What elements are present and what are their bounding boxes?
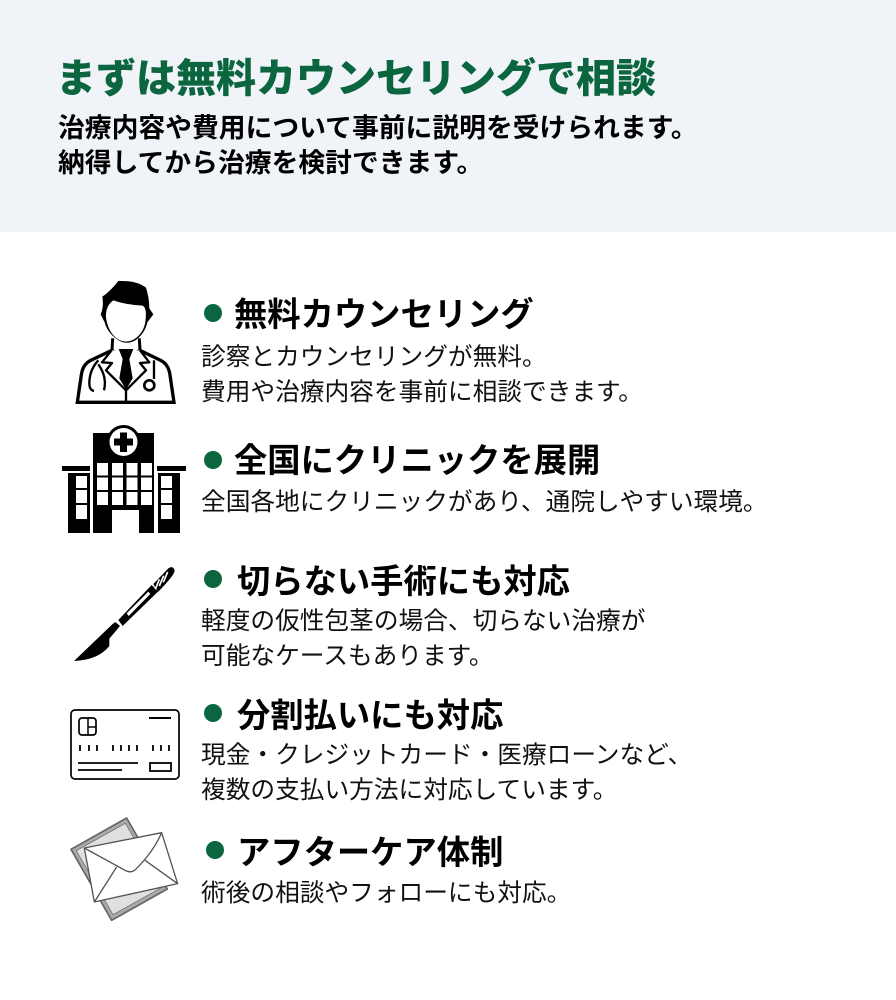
- heading: 分割払いにも対応: [237, 698, 503, 735]
- bullet: [206, 841, 224, 859]
- description: 複数の支払い方法に対応しています。: [201, 777, 617, 804]
- description: 軽度の仮性包茎の場合、切らない治療が: [201, 608, 645, 635]
- header description: [58, 113, 698, 178]
- bullet: [204, 304, 222, 322]
- title: まずは無料カウンセリングで相談: [56, 57, 656, 101]
- bullet: [204, 704, 222, 722]
- description: 診察とカウンセリングが無料。: [201, 344, 547, 371]
- header panel: [0, 0, 896, 232]
- description: [201, 742, 692, 804]
- bullet: [204, 570, 222, 588]
- header description: 納得してから治療を検討できます。: [58, 148, 483, 178]
- heading: 全国にクリニックを展開: [234, 443, 600, 480]
- description: 可能なケースもあります。: [201, 643, 494, 670]
- description: 現金・クレジットカード・医療ローンなど、: [201, 742, 692, 769]
- description: 術後の相談やフォローにも対応。: [201, 880, 571, 907]
- description: [201, 344, 643, 406]
- item: nationwide clinics: [201, 443, 768, 516]
- description: 全国各地にクリニックがあり、通院しやすい環境。: [201, 489, 768, 516]
- description: [201, 608, 645, 670]
- description: 費用や治療内容を事前に相談できます。: [201, 379, 643, 406]
- item: aftercare: [201, 835, 571, 907]
- item: free counseling: [201, 296, 643, 406]
- heading: アフターケア体制: [237, 835, 503, 872]
- heading: 無料カウンセリング: [234, 297, 534, 334]
- item: non-surgical: [201, 564, 645, 670]
- bullet: [204, 451, 222, 469]
- header description: 治療内容や費用について事前に説明を受けられます。: [58, 113, 698, 143]
- heading: 切らない手術にも対応: [237, 564, 570, 601]
- item: installments: [201, 698, 692, 804]
